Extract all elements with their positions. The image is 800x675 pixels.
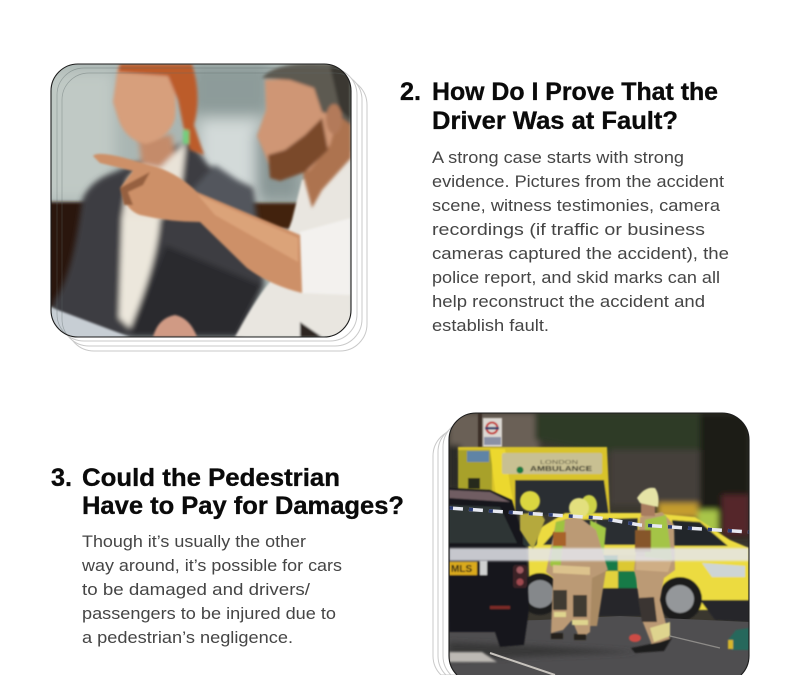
photo: ambulance and firefighters [449,413,750,675]
road [449,616,749,675]
body: question 2: establish fault. [432,316,549,335]
photo: two colleagues pointing [52,64,350,336]
body: question 2: evidence. Pictures from the accident [432,172,724,191]
man shirt [235,150,351,337]
firefighter right [631,488,675,653]
text block: question 3 [51,464,404,647]
body: question 3: way around, it’s possible for cars [81,556,342,575]
body: question 3: to be damaged and drivers/ [82,580,310,599]
heading: question 3 [51,464,404,520]
ambulance [458,447,610,515]
heading: question 3: 3. [51,464,72,492]
body: question 2: A strong case starts with strong [432,148,684,167]
body: question 2: scene, witness testimonies, camera [432,196,721,215]
red cone and kit bag [629,628,749,650]
body: question 3: passengers to be injured due to [82,604,336,623]
heading: question 2 [400,78,718,135]
heading: question 3: Could the Pedestrian [82,464,340,492]
laptop and lower hand [50,307,197,340]
police tape [449,508,749,561]
stacked outline frames [57,68,367,351]
woman [51,135,264,337]
black suv [449,488,537,647]
body: question 3: a pedestrian’s negligence. [82,628,293,647]
stacked outline frames [433,420,500,675]
body: question 3: Though it’s usually the other [82,532,306,551]
body: question 2: recordings (if traffic or business [432,220,705,239]
bench [45,202,300,307]
ambulance: LONDON [540,460,579,466]
body: question 2: police report, and skid marks can all [432,268,720,287]
text block: question 2 [400,78,729,335]
heading: question 2: 2. [400,78,421,106]
man head [257,64,351,208]
body: question 2 [432,148,729,335]
body: question 2: help reconstruct the accident and [432,292,705,311]
pointing arm [93,154,302,293]
panel: driver fault photo [40,64,367,351]
heading: question 2: Driver Was at Fault? [432,107,678,135]
black suv: MLS [451,564,472,575]
body: question 3 [81,532,342,647]
heading: question 3: Have to Pay for Damages? [82,492,404,520]
london underground sign [478,413,502,448]
body: question 2: cameras captured the accident), the [432,244,729,263]
heading: question 2: How Do I Prove That the [432,78,718,106]
panel: accident scene photo [433,413,750,675]
yellow response car [519,513,749,622]
firefighter group [520,491,608,640]
ambulance: AMBULANCE [530,464,592,473]
